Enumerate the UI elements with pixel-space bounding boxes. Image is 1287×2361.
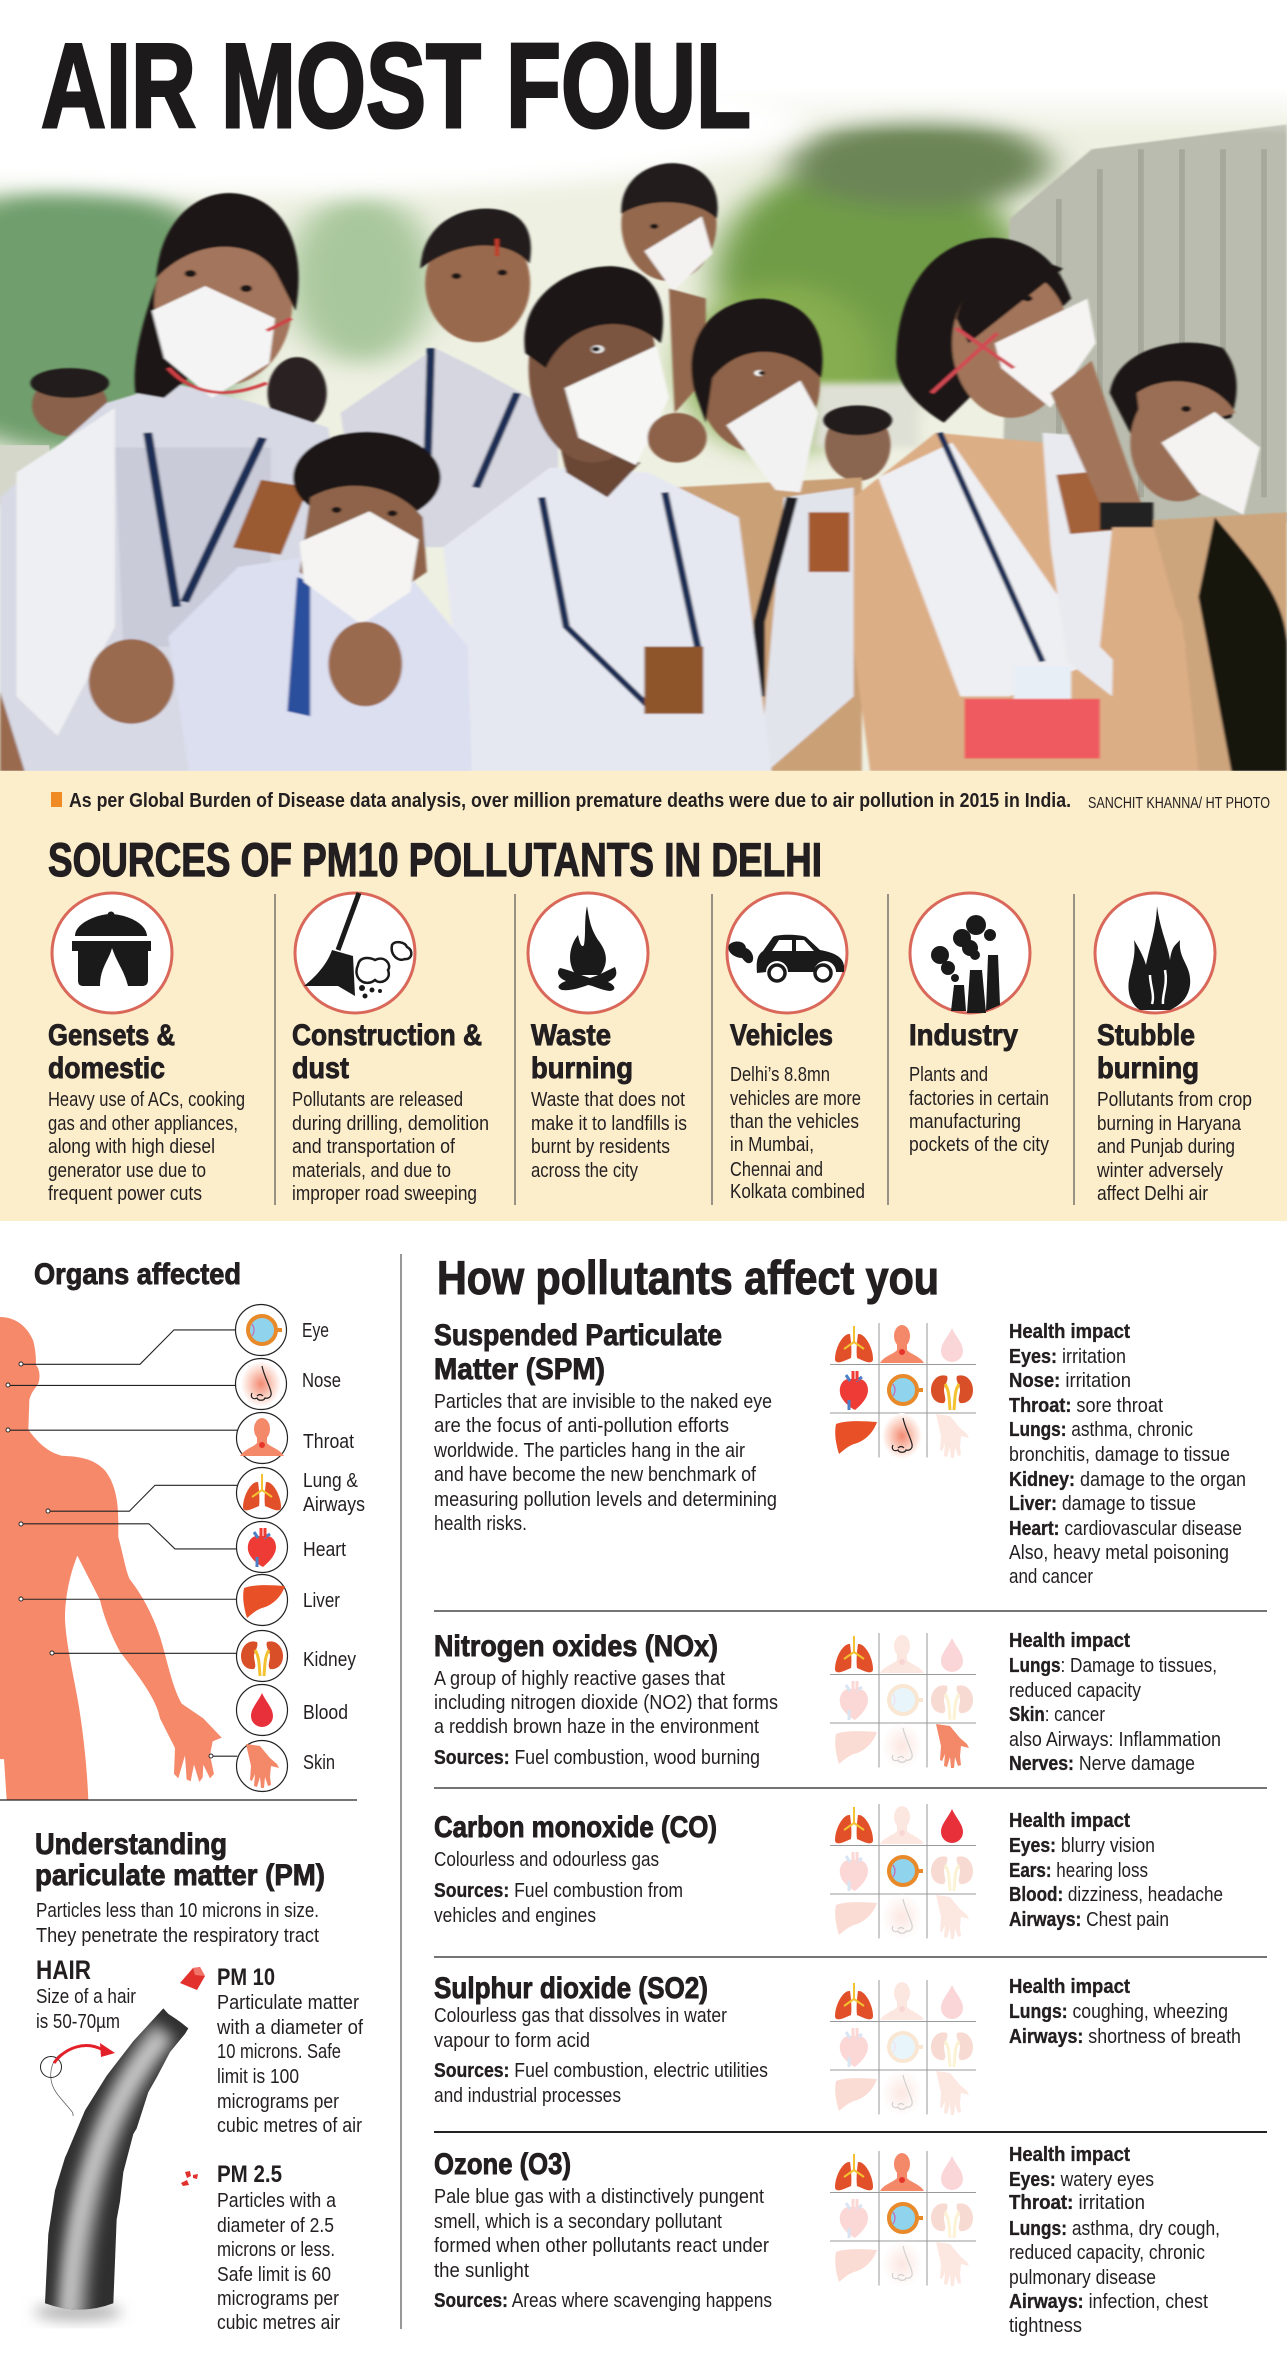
SPM health impact: Throat: sore throat — [1009, 1395, 1163, 1417]
source: industry — [909, 1019, 1049, 1156]
kid B center back boy — [341, 348, 558, 547]
kid A left girl — [0, 383, 345, 771]
organ circle: throat — [236, 1412, 288, 1464]
source: industry: Plants and — [909, 1064, 988, 1086]
icon: gensets pot — [52, 893, 172, 1013]
kid D front boy — [443, 468, 772, 771]
source: construction and dust: during drilling, demolition — [292, 1113, 489, 1135]
heading: how pollutants affect you: How pollutants affect you — [437, 1251, 939, 1304]
CO description: Colourless and odourless gas — [434, 1849, 659, 1871]
organ label: kidney: Kidney — [303, 1649, 356, 1671]
heading: understanding PM — [35, 1828, 325, 1892]
organ label: nose: Nose — [302, 1370, 341, 1392]
organ label: lung and airways — [303, 1470, 365, 1516]
NOx description: Sources: Fuel combustion, wood burning — [434, 1747, 760, 1769]
NOx health impact: reduced capacity — [1009, 1680, 1141, 1702]
organ circle: eye — [236, 1304, 286, 1356]
SPM description: Matter (SPM) — [434, 1353, 605, 1386]
source: industry: manufacturing — [909, 1111, 1021, 1133]
source: gensets: Gensets & — [48, 1019, 175, 1052]
O3 health impact — [1009, 2144, 1220, 2337]
NOx health impact: Lungs: Damage to tissues, — [1009, 1655, 1217, 1677]
NOx description: a reddish brown haze in the environment — [434, 1716, 759, 1738]
icon: factory chimneys — [910, 893, 1030, 1013]
PM10 text: micrograms per — [217, 2091, 339, 2113]
source: construction and dust — [292, 1019, 489, 1205]
source: vehicles: vehicles are more — [730, 1088, 861, 1110]
magnifying circle and arrow — [40, 2043, 115, 2116]
organ label: lung and airways: Airways — [303, 1494, 365, 1516]
source: vehicles: Vehicles — [730, 1019, 833, 1052]
leader lines — [8, 1330, 237, 1756]
organ circle: liver — [236, 1574, 288, 1626]
kid H far right girl — [1116, 512, 1287, 771]
SPM health impact: Nose: irritation — [1009, 1370, 1131, 1392]
O3 health impact: pulmonary disease — [1009, 2267, 1156, 2289]
SO2 description: Sulphur dioxide (SO2) — [434, 1972, 708, 2005]
CO description: vehicles and engines — [434, 1905, 596, 1927]
source: vehicles: in Mumbai, — [730, 1134, 814, 1156]
CO health impact: Blood: dizziness, headache — [1009, 1884, 1223, 1906]
O3 description: Ozone (O3) — [434, 2148, 571, 2181]
SPM description: worldwide. The particles hang in the air — [433, 1440, 745, 1462]
source: waste burning: Waste that does not — [531, 1089, 685, 1111]
SPM health impact: and cancer — [1009, 1566, 1093, 1588]
heading: sources of PM10: SOURCES OF PM10 POLLUTANTS IN DELHI — [48, 833, 822, 886]
NOx health impact: also Airways: Inflammation — [1009, 1729, 1221, 1751]
icon: waste fire — [528, 893, 648, 1013]
source: construction and dust: materials, and due to — [292, 1160, 451, 1182]
NOx description: Nitrogen oxides (NOx) — [434, 1630, 718, 1663]
SPM health impact: Kidney: damage to the organ — [1009, 1469, 1246, 1491]
source: construction and dust: and transportation of — [292, 1136, 455, 1158]
NOx description: A group of highly reactive gases that — [434, 1668, 725, 1690]
source: stubble burning: burning in Haryana — [1097, 1113, 1242, 1135]
heading: organs affected: Organs affected — [34, 1258, 241, 1291]
icon: broom and dust — [295, 893, 415, 1013]
organ label: blood: Blood — [303, 1702, 348, 1724]
SO2 health impact — [1009, 1976, 1241, 2048]
PM2.5 text: diameter of 2.5 — [217, 2215, 334, 2237]
kid F small boy — [168, 557, 472, 771]
organ circle: kidney — [236, 1630, 288, 1682]
O3 description: formed when other pollutants react under — [434, 2235, 769, 2257]
panel: organs affected — [0, 1258, 365, 1800]
source: industry: factories in certain — [909, 1088, 1049, 1110]
panel: carbon monoxide — [434, 1804, 1223, 1940]
SO2 health impact: Lungs: coughing, wheezing — [1009, 2001, 1228, 2023]
SO2 health impact: Airways: shortness of breath — [1009, 2026, 1241, 2048]
CO health impact — [1009, 1810, 1223, 1931]
kid C top boy — [621, 167, 717, 281]
CO description: Carbon monoxide (CO) — [434, 1811, 717, 1844]
CO health impact: Eyes: blurry vision — [1009, 1835, 1155, 1857]
source: gensets — [48, 1019, 245, 1205]
source: construction and dust: Construction & — [292, 1019, 482, 1052]
O3 health impact: tightness — [1009, 2315, 1082, 2337]
hair strand illustration — [34, 2000, 200, 2321]
icon: car — [727, 893, 847, 1013]
title: AIR MOST FOUL — [41, 19, 751, 153]
body silhouette — [0, 1317, 222, 1800]
panel: ozone — [434, 2144, 1220, 2337]
source: gensets: generator use due to — [48, 1160, 206, 1182]
source: gensets: along with high diesel — [48, 1136, 215, 1158]
kid E girl — [673, 478, 862, 771]
panel: sulphur dioxide — [434, 1972, 1241, 2116]
PM10 text: with a diameter of — [216, 2017, 363, 2039]
source: gensets: Heavy use of ACs, cooking — [48, 1089, 245, 1111]
source: waste burning: Waste — [531, 1019, 611, 1052]
source: stubble burning: and Punjab during — [1097, 1136, 1235, 1158]
CO health impact: Airways: Chest pain — [1009, 1909, 1169, 1931]
NOx health impact: Health impact — [1009, 1630, 1130, 1652]
O3 description: smell, which is a secondary pollutant — [434, 2211, 722, 2233]
source: construction and dust: improper road sweeping — [292, 1183, 477, 1205]
organ label: lung and airways: Lung & — [303, 1470, 359, 1492]
source: waste burning: burning — [531, 1052, 633, 1085]
PM2.5 text: PM 2.5 — [217, 2161, 282, 2188]
source: gensets: domestic — [48, 1052, 165, 1085]
kid G tall girl right — [854, 433, 1198, 771]
panel: sources band — [0, 771, 1287, 1221]
SPM health impact: bronchitis, damage to tissue — [1009, 1444, 1230, 1466]
PM intro text: Particles less than 10 microns in size. — [36, 1900, 319, 1922]
PM10 text — [216, 1964, 363, 2137]
source: stubble burning: burning — [1097, 1052, 1199, 1085]
O3 health impact: Lungs: asthma, dry cough, — [1009, 2218, 1220, 2240]
NOx health impact: Skin: cancer — [1009, 1704, 1105, 1726]
PM2.5 text: microns or less. — [217, 2239, 335, 2261]
SPM health impact: Health impact — [1009, 1321, 1130, 1343]
O3 description — [434, 2148, 772, 2312]
source: stubble burning: winter adversely — [1096, 1160, 1223, 1182]
PM10 text: cubic metres of air — [217, 2115, 362, 2137]
O3 health impact: Throat: irritation — [1009, 2192, 1145, 2214]
SO2 description: Sources: Fuel combustion, electric utilities — [434, 2060, 768, 2082]
SO2 organ grid — [830, 1980, 976, 2116]
organ circle: lungs — [236, 1468, 288, 1518]
source: stubble burning: Stubble — [1097, 1019, 1195, 1052]
NOx organ grid — [830, 1633, 976, 1769]
PM2.5 text — [217, 2161, 340, 2334]
CO health impact: Ears: hearing loss — [1009, 1860, 1148, 1882]
PM10 text: PM 10 — [217, 1964, 275, 1991]
photo: students in masks — [0, 0, 1287, 771]
organ label: skin: Skin — [303, 1752, 335, 1774]
icon: PM10 particle — [180, 1967, 205, 1990]
SPM description — [433, 1319, 777, 1535]
O3 description: the sunlight — [434, 2260, 529, 2282]
source: gensets: gas and other appliances, — [48, 1113, 238, 1135]
NOx health impact: Nerves: Nerve damage — [1009, 1753, 1195, 1775]
O3 health impact: Airways: infection, chest — [1009, 2291, 1208, 2313]
O3 organ grid — [830, 2151, 976, 2287]
source: construction and dust: dust — [292, 1052, 349, 1085]
O3 description: Pale blue gas with a distinctively pungent — [434, 2186, 764, 2208]
organ label: throat: Throat — [303, 1431, 354, 1453]
SO2 description: vapour to form acid — [434, 2030, 590, 2052]
hair text: HAIR — [36, 1955, 91, 1985]
source: stubble burning — [1096, 1019, 1252, 1205]
panel: nitrogen oxides — [434, 1630, 1221, 1775]
CO health impact: Health impact — [1009, 1810, 1130, 1832]
organ circle: heart — [236, 1522, 288, 1572]
organ circle: blood — [236, 1684, 288, 1736]
source: waste burning: burnt by residents — [531, 1136, 670, 1158]
source: stubble burning: Pollutants from crop — [1097, 1089, 1252, 1111]
SPM description: Suspended Particulate — [434, 1319, 722, 1352]
SO2 description — [434, 1972, 768, 2107]
SPM description: measuring pollution levels and determining — [434, 1489, 777, 1511]
source: waste burning: across the city — [531, 1160, 638, 1182]
panel: suspended particulate matter — [433, 1319, 1246, 1588]
source: waste burning — [531, 1019, 687, 1182]
NOx health impact — [1009, 1630, 1221, 1775]
SPM organ grid — [830, 1323, 976, 1459]
SPM description: are the focus of anti-pollution efforts — [434, 1415, 729, 1437]
SPM description: health risks. — [434, 1513, 527, 1535]
CO description: Sources: Fuel combustion from — [434, 1880, 683, 1902]
organ circle: nose — [236, 1358, 286, 1410]
PM10 text: limit is 100 — [217, 2066, 299, 2088]
SPM description: and have become the new benchmark of — [434, 1464, 756, 1486]
source: vehicles: Delhi’s 8.8mn — [730, 1064, 830, 1086]
source: vehicles: Chennai and — [730, 1159, 823, 1181]
PM2.5 text: cubic metres air — [217, 2312, 340, 2334]
NOx description — [434, 1630, 778, 1769]
SPM health impact: Eyes: irritation — [1009, 1346, 1126, 1368]
SPM description: Particles that are invisible to the naked eye — [434, 1391, 772, 1413]
PM10 text: 10 microns. Safe — [217, 2041, 341, 2063]
source: construction and dust: Pollutants are released — [292, 1089, 463, 1111]
icon: PM2.5 particles — [181, 2171, 198, 2186]
CO organ grid — [830, 1804, 976, 1940]
heading: understanding PM: Understanding — [35, 1828, 227, 1861]
PM intro text — [36, 1900, 319, 1947]
O3 health impact: Eyes: watery eyes — [1009, 2169, 1154, 2191]
NOx description: including nitrogen dioxide (NO2) that forms — [434, 1692, 778, 1714]
SO2 description: and industrial processes — [434, 2085, 621, 2107]
source: vehicles: than the vehicles — [730, 1111, 859, 1133]
source: vehicles: Kolkata combined — [730, 1181, 865, 1203]
O3 health impact: Health impact — [1009, 2144, 1130, 2166]
organ label: heart: Heart — [303, 1539, 346, 1561]
photo caption: As per Global Burden of Disease data analysis, over million premature deaths were due to air pollution in 2015 in India. — [69, 790, 1071, 812]
organ circle: skin — [236, 1740, 288, 1792]
PM2.5 text: Safe limit is 60 — [217, 2264, 331, 2286]
organ label: liver: Liver — [303, 1590, 340, 1612]
source: industry: pockets of the city — [909, 1134, 1049, 1156]
SPM health impact: Also, heavy metal poisoning — [1009, 1542, 1229, 1564]
CO description — [434, 1811, 717, 1927]
source: waste burning: make it to landfills is — [531, 1113, 687, 1135]
heading: understanding PM: pariculate matter (PM) — [35, 1859, 325, 1892]
PM2.5 text: micrograms per — [217, 2288, 339, 2310]
panel: understanding particulate matter — [34, 1828, 363, 2334]
hair text — [36, 1955, 136, 2033]
hair text: is 50-70µm — [36, 2011, 120, 2033]
O3 health impact: reduced capacity, chronic — [1009, 2242, 1205, 2264]
source: vehicles — [730, 1019, 865, 1203]
background kids — [32, 375, 108, 436]
PM intro text: They penetrate the respiratory tract — [36, 1925, 319, 1947]
hair text: Size of a hair — [36, 1986, 136, 2008]
organ label: eye: Eye — [302, 1320, 329, 1342]
PM10 text: Particulate matter — [217, 1992, 359, 2014]
PM2.5 text: Particles with a — [217, 2190, 337, 2212]
SPM health impact: Heart: cardiovascular disease — [1009, 1518, 1242, 1540]
SO2 health impact: Health impact — [1009, 1976, 1130, 1998]
source: gensets: frequent power cuts — [48, 1183, 202, 1205]
SPM health impact — [1009, 1321, 1246, 1588]
source: stubble burning: affect Delhi air — [1097, 1183, 1208, 1205]
source: industry: Industry — [909, 1019, 1018, 1052]
O3 description: Sources: Areas where scavenging happens — [434, 2290, 772, 2312]
SPM health impact: Liver: damage to tissue — [1009, 1493, 1196, 1515]
SPM health impact: Lungs: asthma, chronic — [1009, 1419, 1193, 1441]
SO2 description: Colourless gas that dissolves in water — [434, 2005, 727, 2027]
icon: stubble fire — [1095, 893, 1215, 1013]
